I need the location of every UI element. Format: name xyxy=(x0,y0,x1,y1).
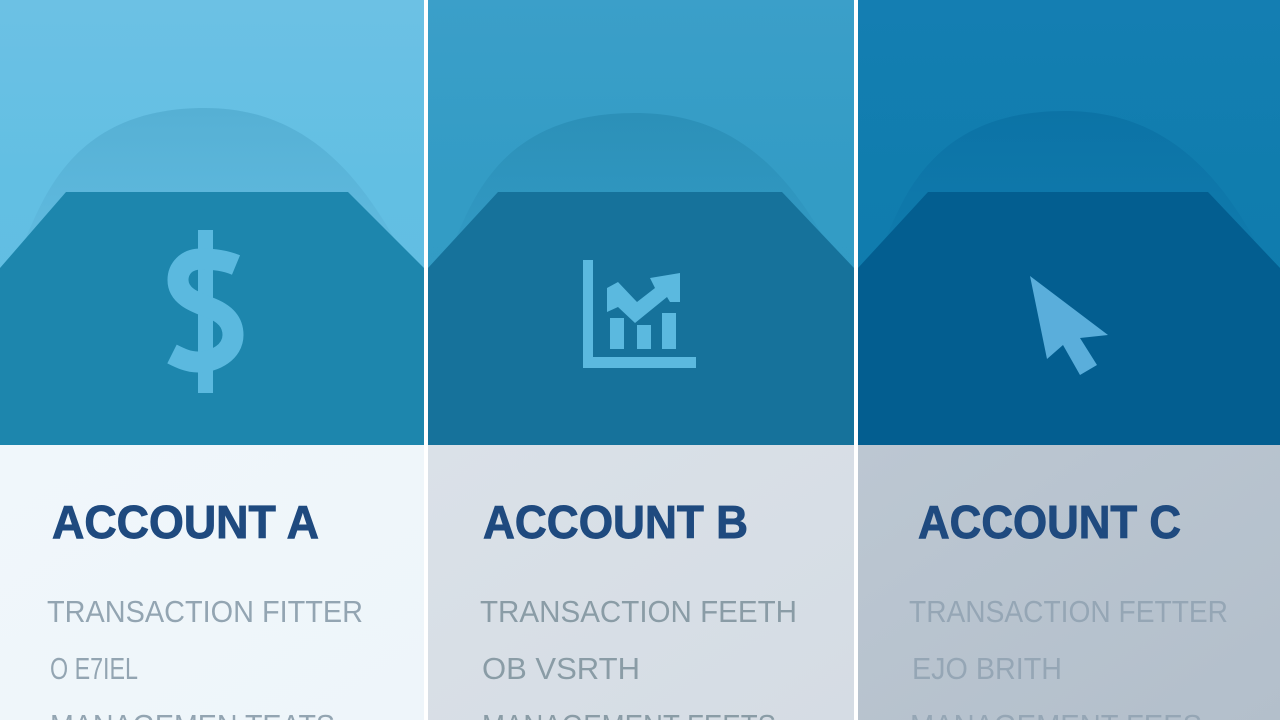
panel C fee lines: TRANSACTION FETTER xyxy=(909,594,1228,629)
panel B heading: ACCOUNT B xyxy=(483,496,748,548)
panel C dome xyxy=(885,111,1255,240)
icon: growth chart xyxy=(583,260,696,368)
panel C text area xyxy=(858,445,1280,720)
panel C heading: ACCOUNT C xyxy=(918,496,1181,548)
panel B header block xyxy=(428,192,854,445)
panel A header block xyxy=(0,192,424,445)
panel B text area xyxy=(428,445,854,720)
panel A heading: ACCOUNT A xyxy=(52,496,319,548)
panel: account A xyxy=(0,0,424,720)
panel A fee lines: O E7IEL xyxy=(50,651,138,686)
panel A fee lines xyxy=(47,594,363,720)
icon: cursor arrow xyxy=(1030,276,1108,375)
panel C fee lines xyxy=(909,594,1228,720)
panel B fee lines: OB VSRTH xyxy=(482,651,640,686)
panel B dome xyxy=(455,113,825,240)
panel B fee lines: TRANSACTION FEETH xyxy=(480,594,797,629)
panel A text area xyxy=(0,445,424,720)
panel A dome xyxy=(25,108,395,240)
icon: dollar sign xyxy=(172,230,236,393)
panel A fee lines: TRANSACTION FITTER xyxy=(47,594,363,629)
panel C fee lines: EJO BRITH xyxy=(912,651,1062,686)
panel A sky background xyxy=(0,0,424,445)
panel C sky background xyxy=(858,0,1280,445)
panel: account C xyxy=(858,0,1280,720)
panel B fee lines xyxy=(480,594,797,720)
panel B sky background xyxy=(428,0,854,445)
panel C header block xyxy=(858,192,1280,445)
panel: account B xyxy=(428,0,854,720)
